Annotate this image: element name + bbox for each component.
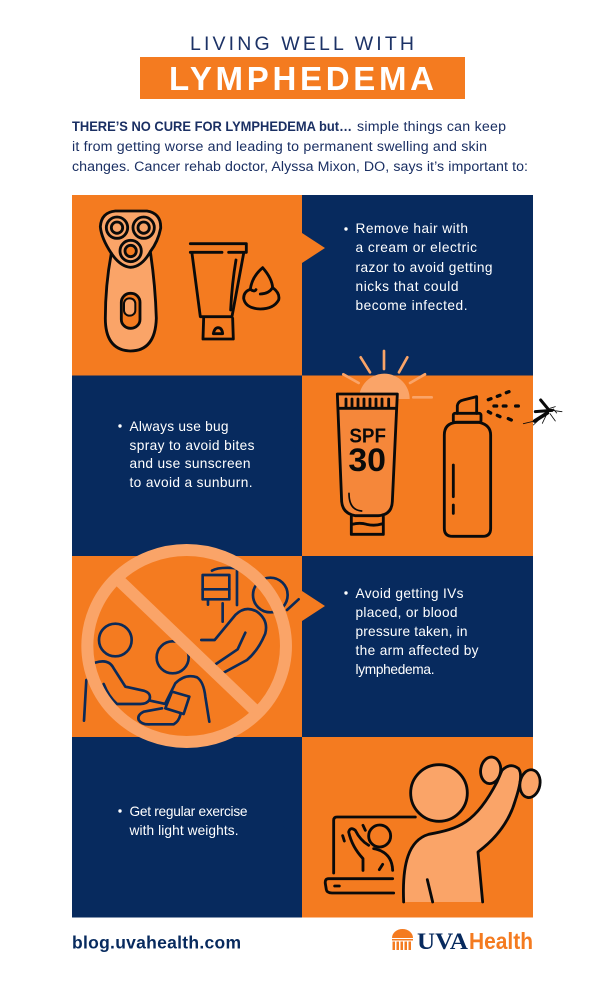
title: living well with: LIVING WELL WITH [190, 33, 414, 55]
icon: iv drip scene [201, 568, 299, 673]
icon: sun [343, 351, 432, 399]
icon: spf 30 sunscreen tube: 30 [348, 442, 386, 478]
intro text: simple things can keep [357, 119, 506, 135]
icon: cream tube and foam [190, 244, 279, 339]
icon: blood pressure scene [84, 624, 209, 724]
text: bug spray: Always use bug [130, 419, 228, 434]
text: remove hair [344, 221, 492, 313]
text: exercise: with light weights. [128, 823, 238, 838]
logo: uva health: UVA [417, 929, 468, 955]
logo: uva health: Health [469, 928, 533, 954]
icon: person lifting weights [403, 756, 542, 902]
icon: spray bottle [444, 392, 518, 536]
text: bug spray [118, 419, 255, 490]
text: avoid ivs: the arm affected by [356, 643, 479, 658]
panel: iv and blood pressure [72, 556, 533, 737]
icon: prohibition sign [87, 550, 286, 742]
text: remove hair: Remove hair with [356, 221, 468, 236]
text: exercise [118, 804, 248, 838]
intro text: changes. Cancer rehab doctor, Alyssa Mixon, DO, says it’s important to: [72, 159, 528, 175]
arrow: pointer left [280, 423, 302, 453]
text: avoid ivs [344, 586, 479, 677]
text: remove hair: razor to avoid getting [356, 260, 492, 275]
text: avoid ivs: lymphedema. [356, 662, 434, 677]
text: avoid ivs: Avoid getting IVs [356, 586, 464, 601]
icon: spf 30 sunscreen tube: SPF [349, 424, 386, 447]
intro text: THERE’S NO CURE FOR LYMPHEDEMA but… [72, 119, 352, 134]
title banner: lymphedema: LYMPHEDEMA [169, 60, 434, 97]
logo: uva health [392, 928, 533, 955]
text: avoid ivs: pressure taken, in [356, 624, 468, 639]
intro text: it from getting worse and leading to permanent swelling and skin [72, 139, 487, 155]
text: avoid ivs: placed, or blood [356, 605, 458, 620]
icon: electric razor [100, 211, 161, 351]
icon: mosquito [523, 400, 562, 425]
icon: laptop with instructor [325, 817, 415, 893]
text: bug spray: and use sunscreen [130, 456, 250, 471]
panel: bug spray and sunscreen [72, 351, 562, 556]
panel: exercise [72, 737, 542, 918]
text: remove hair: nicks that could [356, 279, 458, 294]
text: remove hair: a cream or electric [356, 240, 477, 255]
intro text [72, 119, 528, 175]
text: remove hair: become infected. [356, 298, 468, 313]
arrow: pointer right [302, 233, 325, 263]
footer url: blog.uvahealth.com [72, 932, 241, 952]
text: exercise: Get regular exercise [130, 804, 248, 819]
icon: spf 30 sunscreen tube [337, 394, 397, 534]
panel: hair removal [72, 195, 533, 376]
text: bug spray: to avoid a sunburn. [130, 475, 252, 490]
arrow: pointer left [280, 809, 302, 839]
arrow: pointer right [302, 591, 325, 621]
icon: rotunda dome [392, 929, 413, 950]
text: bug spray: spray to avoid bites [130, 438, 255, 453]
